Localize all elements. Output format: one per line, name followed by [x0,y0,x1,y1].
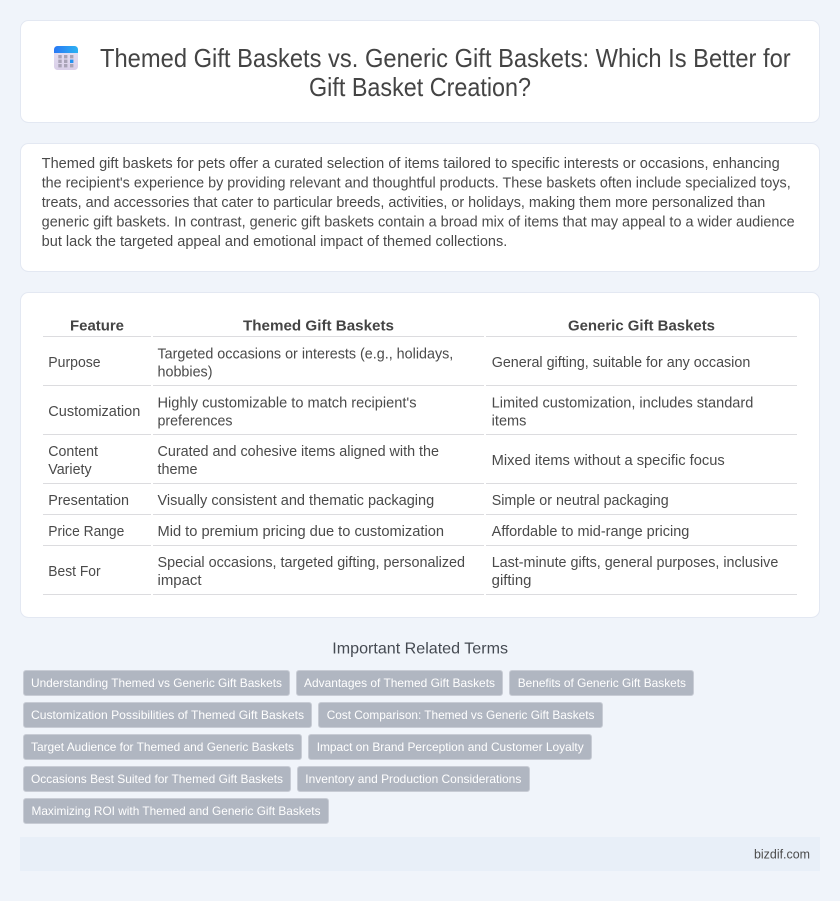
table header row: Generic Gift Baskets [568,318,715,334]
title: Themed Gift Baskets vs. Generic Gift Baskets: Which Is Better for [100,45,791,73]
panel: comparison table [20,292,820,618]
row: content variety: Mixed items without a specific focus [492,453,725,469]
row: presentation: Simple or neutral packaging [492,493,669,509]
row: content variety: theme [158,462,198,478]
row: best for: Special occasions, targeted gifting, personalized [158,555,465,571]
panel: intro paragraph: Themed gift baskets for pets offer a curated selection of items tailored to specific interests or occasions, enhancing [42,156,780,172]
panel: intro paragraph: generic gift baskets. In contrast, generic gift baskets contain a broad mix of items that may appeal to a wider audience [42,214,795,230]
row: purpose: Purpose [48,355,101,371]
panel: related term tags: Target Audience for Themed and Generic Baskets [31,740,294,754]
row: purpose: General gifting, suitable for any occasion [492,355,750,371]
table header row [70,318,715,334]
footer: bizdif.com [754,846,810,861]
row: presentation: Visually consistent and thematic packaging [158,493,434,509]
row: customization: Customization [48,404,140,420]
row: best for: Best For [48,564,101,580]
icon: calendar [54,46,78,70]
row: best for [48,555,778,589]
row: content variety [48,444,725,478]
table header row: Feature [70,318,124,334]
panel: related term tags: Advantages of Themed Gift Baskets [304,676,495,690]
panel: related term tags: Understanding Themed vs Generic Gift Baskets [31,676,282,690]
row: customization [48,395,753,429]
row: content variety: Content [48,444,98,460]
row: best for: Last-minute gifts, general purposes, inclusive [492,555,778,571]
panel: intro paragraph: but lack the targeted appeal and emotional impact of themed collections. [42,234,507,250]
panel: intro paragraph: the recipient's experience by providing relevant and thoughtful products. These baskets often include specialized toys, [42,176,791,192]
row: price range: Affordable to mid-range pricing [492,524,689,540]
footer [20,837,820,871]
row: presentation: Presentation [48,493,129,509]
panel: title card [20,20,820,122]
panel: related term tags: Inventory and Production Considerations [305,772,521,786]
row: customization: items [492,413,526,429]
row: purpose: hobbies) [158,364,212,380]
row: content variety: Curated and cohesive items aligned with the [158,444,439,460]
row: purpose [48,346,750,380]
row: presentation [48,493,669,509]
panel: related term tags: Maximizing ROI with Themed and Generic Gift Baskets [32,804,320,818]
panel: related term tags: Customization Possibilities of Themed Gift Baskets [31,708,304,722]
panel: related term tags: Impact on Brand Perception and Customer Loyalty [317,740,584,754]
panel: intro paragraph: treats, and accessories that cater to particular breeds, activities, or holidays, making them more personalized than [42,195,765,211]
row: customization: Highly customizable to match recipient's [158,395,416,411]
panel: related term tags: Benefits of Generic Gift Baskets [518,676,686,690]
row: purpose: Targeted occasions or interests (e.g., holidays, [158,346,453,362]
row: customization: Limited customization, includes standard [492,395,753,411]
panel: related term tags: Occasions Best Suited for Themed Gift Baskets [31,772,283,786]
heading: important related terms: Important Related Terms [332,640,508,657]
row: price range: Price Range [48,524,124,540]
panel: related term tags: Cost Comparison: Themed vs Generic Gift Baskets [327,708,594,722]
row: customization: preferences [158,413,232,429]
panel: related term tags [24,670,694,824]
title: Gift Basket Creation? [309,74,531,102]
panel: intro paragraph [20,144,820,272]
row: price range: Mid to premium pricing due to customization [158,524,444,540]
row: best for: gifting [492,573,531,589]
row: content variety: Variety [48,462,92,478]
row: price range [48,524,689,540]
row: best for: impact [158,573,202,589]
table header row: Themed Gift Baskets [243,318,394,334]
title [100,45,791,102]
